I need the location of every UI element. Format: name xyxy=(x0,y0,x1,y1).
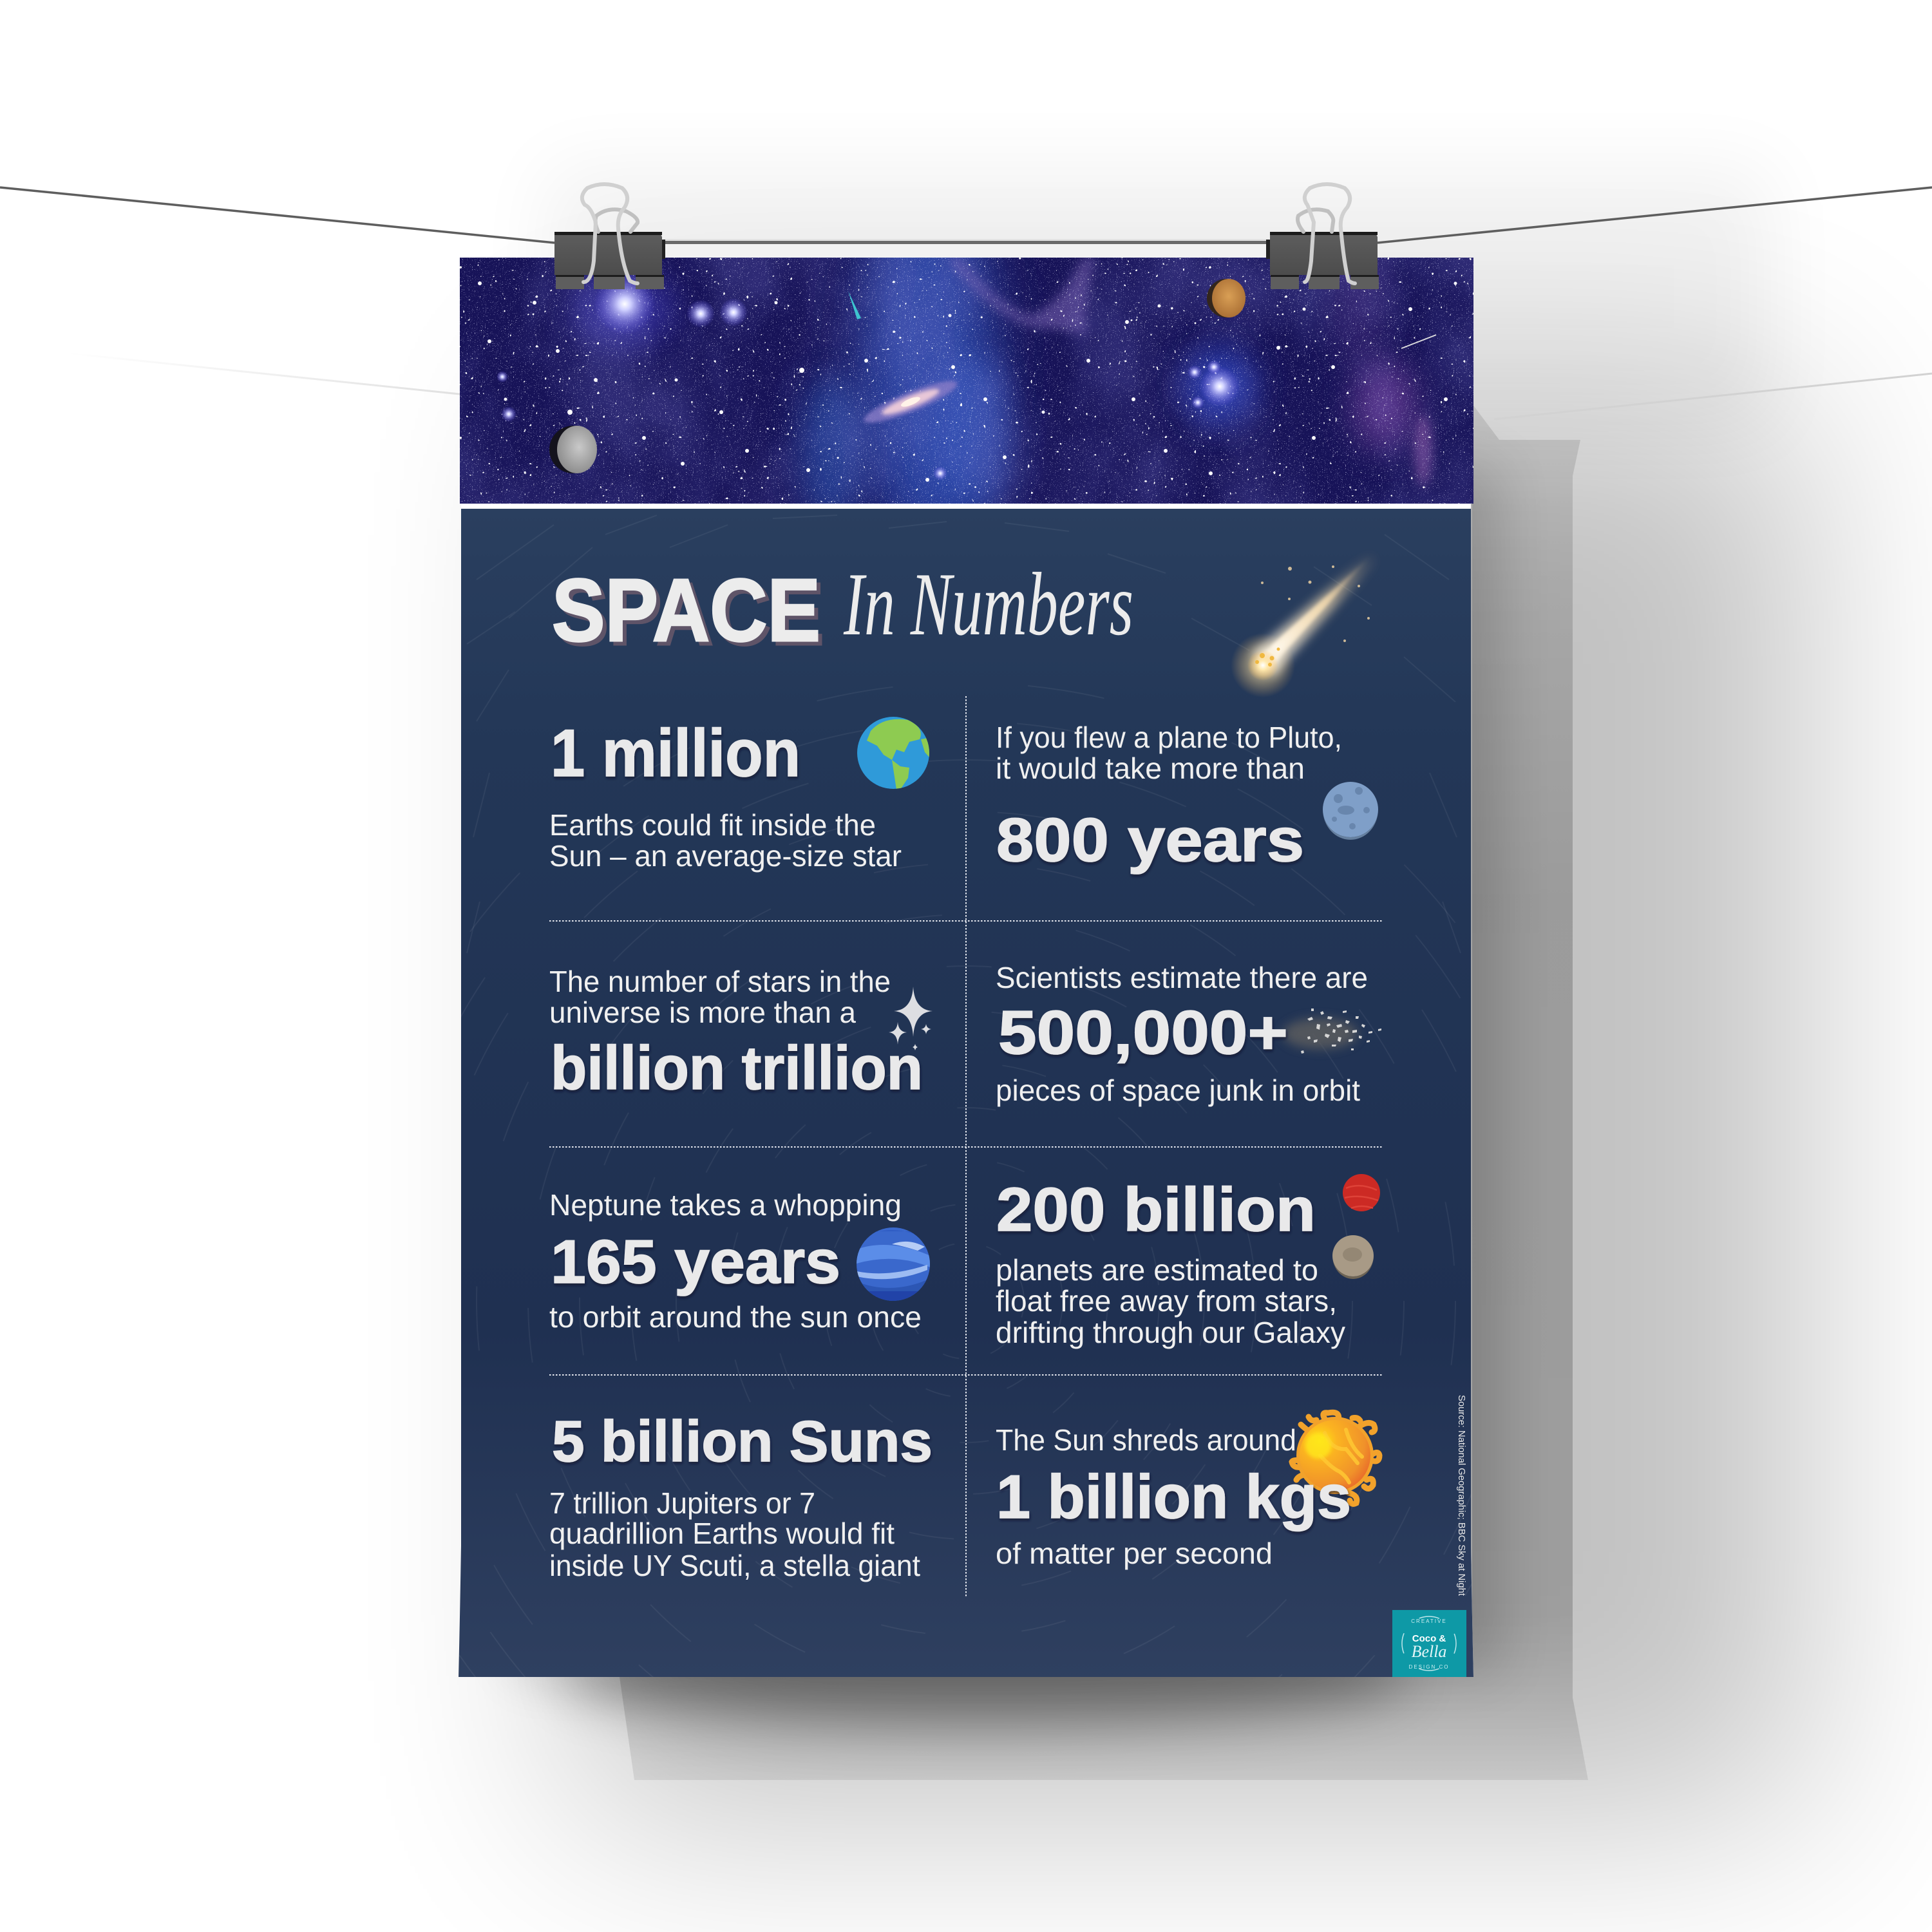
intro text xyxy=(549,965,891,1029)
wire shadow right xyxy=(1494,374,1932,419)
icon: comet xyxy=(1231,554,1377,697)
icon: sun xyxy=(1292,1412,1379,1504)
logo badge: DESIGN CO xyxy=(1409,1664,1449,1670)
scattered stars xyxy=(459,258,1475,504)
logo badge: CREATIVE xyxy=(1411,1618,1447,1624)
hanging wire right xyxy=(1378,187,1932,243)
cloud texture xyxy=(459,258,1475,504)
icon: pluto xyxy=(1323,782,1378,840)
title: In Numbers script: In Numbers xyxy=(843,554,1133,654)
stat: 500,000+ xyxy=(996,961,1381,1107)
intro text: The Sun shreds around xyxy=(996,1423,1296,1457)
stat: 800 years xyxy=(996,721,1378,875)
caption: drifting through our Galaxy xyxy=(996,1316,1345,1349)
intro text: it would take more than xyxy=(996,752,1305,785)
logo badge: Bella xyxy=(1412,1642,1446,1661)
intro text: Neptune takes a whopping xyxy=(549,1188,902,1222)
caption: to orbit around the sun once xyxy=(549,1300,922,1334)
stat: 165 years xyxy=(549,1188,931,1334)
shooting star xyxy=(1401,335,1436,348)
number: billion trillion xyxy=(551,1034,923,1103)
caption: Sun – an average-size star xyxy=(549,839,902,873)
caption: pieces of space junk in orbit xyxy=(996,1074,1360,1107)
clip body xyxy=(554,232,665,289)
caption: quadrillion Earths would fit xyxy=(549,1517,895,1550)
blue nebula xyxy=(573,167,1255,554)
binder clip right xyxy=(1266,184,1379,289)
caption: float free away from stars, xyxy=(996,1284,1337,1318)
icon: sparkling stars xyxy=(889,987,933,1050)
poster paper xyxy=(459,258,1473,1677)
caption xyxy=(549,808,902,873)
caption: 7 trillion Jupiters or 7 xyxy=(549,1486,815,1520)
caption: Earths could fit inside the xyxy=(549,808,876,842)
number: 5 billion Suns xyxy=(552,1410,933,1474)
wire shadow left xyxy=(64,353,460,394)
caption: planets are estimated to xyxy=(996,1253,1318,1287)
bright stars xyxy=(478,281,1457,482)
clip handles xyxy=(1298,184,1355,283)
star trail arcs xyxy=(348,683,1584,1919)
icon: red planet xyxy=(1343,1174,1380,1211)
logo badge xyxy=(1392,1610,1466,1677)
number: 500,000+ xyxy=(998,998,1288,1067)
rod between clips xyxy=(663,239,1269,258)
icon: space junk xyxy=(1283,1009,1381,1054)
teal comet xyxy=(848,291,861,319)
stat: 5 billion Suns xyxy=(549,1410,933,1582)
hanging wire left xyxy=(0,187,554,243)
source note: Source: National Geographic; BBC Sky at Night xyxy=(1456,1395,1467,1596)
number: 200 billion xyxy=(996,1175,1316,1244)
binder clip left xyxy=(554,184,665,289)
fine star dust xyxy=(459,258,1475,504)
caption xyxy=(549,1486,920,1582)
intro text: The number of stars in the xyxy=(549,965,891,998)
caption: of matter per second xyxy=(996,1537,1273,1570)
caption: inside UY Scuti, a stella giant xyxy=(549,1549,920,1582)
number: 1 million xyxy=(551,716,800,791)
title xyxy=(552,554,1133,664)
star trail streaks at top xyxy=(467,515,1461,953)
soft contact shadow beside poster xyxy=(515,464,1501,1674)
bright blue stars xyxy=(497,273,1240,480)
navy panel xyxy=(348,509,1584,1919)
stat: billion trillion xyxy=(549,965,933,1103)
space photo banner xyxy=(460,258,1473,504)
hard-edged poster shadow on wall xyxy=(620,404,1588,1780)
clip body xyxy=(1266,232,1379,289)
icon: earth xyxy=(857,717,931,791)
intro text: If you flew a plane to Pluto, xyxy=(996,721,1342,754)
logo badge: Coco & xyxy=(1412,1633,1446,1644)
clip handles xyxy=(582,184,638,283)
divider lines xyxy=(549,696,1383,1598)
white stripe under banner xyxy=(461,504,1471,509)
intro text xyxy=(996,721,1342,785)
intro text: Scientists estimate there are xyxy=(996,961,1368,994)
number: 1 billion kgs xyxy=(996,1463,1351,1531)
stat: 200 billion xyxy=(996,1174,1380,1349)
caption xyxy=(996,1253,1345,1349)
number: 800 years xyxy=(996,806,1304,875)
stat: 1 billion kgs xyxy=(996,1412,1379,1570)
icon: neptune xyxy=(857,1227,931,1304)
intro text: universe is more than a xyxy=(549,996,856,1029)
number: 165 years xyxy=(551,1227,840,1296)
title: SPACE shadow: SPACE xyxy=(556,565,824,664)
soft contact shadow beneath poster xyxy=(560,1623,1410,1726)
icon: grey planet xyxy=(1332,1235,1374,1279)
spiral galaxy xyxy=(860,374,961,430)
purple nebula xyxy=(947,238,1432,486)
orange planet in banner xyxy=(1207,279,1245,317)
moon in banner xyxy=(549,426,597,473)
title: SPACE: SPACE xyxy=(552,561,820,660)
stat: 1 million xyxy=(549,716,931,873)
